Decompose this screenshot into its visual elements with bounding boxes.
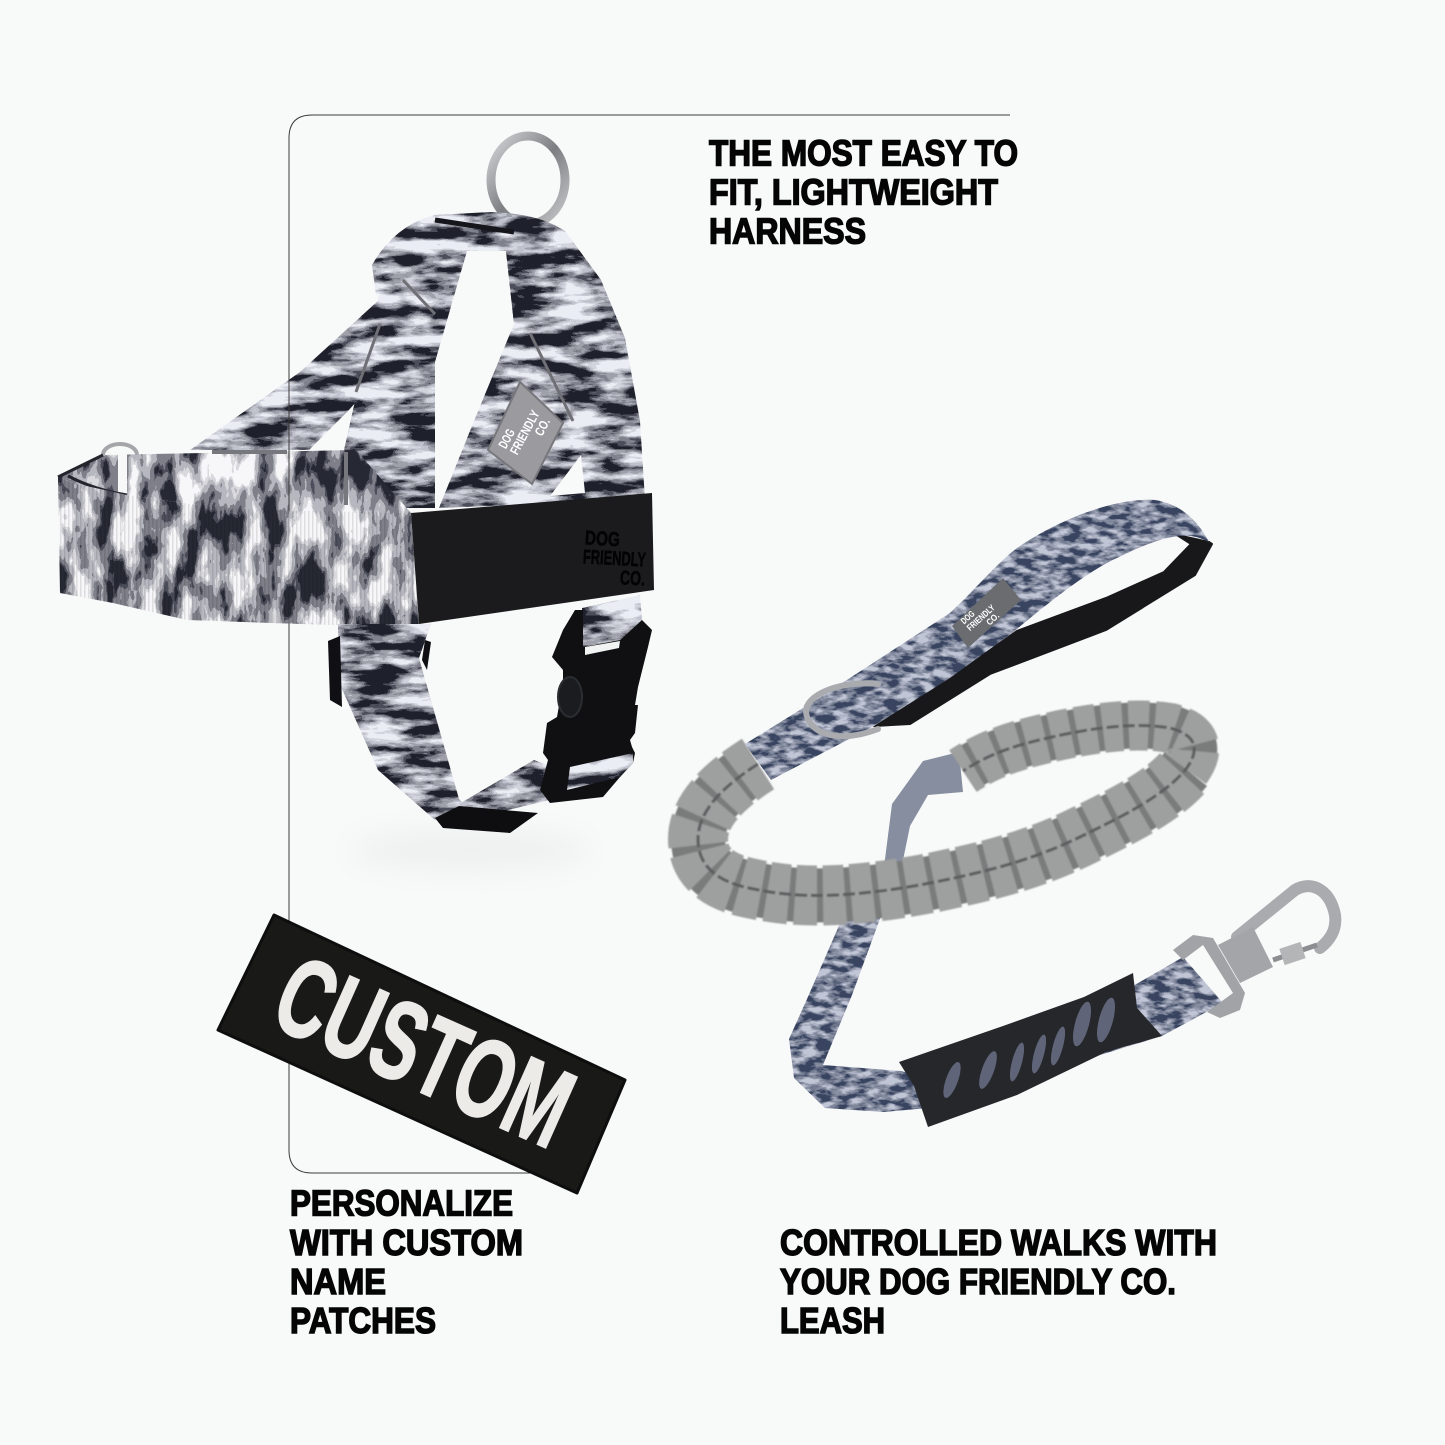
clasp body — [1218, 927, 1273, 983]
caption: patches — [290, 1182, 523, 1341]
rubber grip — [899, 973, 1162, 1127]
handle D ring — [806, 683, 878, 736]
pad brand text — [581, 527, 648, 591]
caption: patches: WITH CUSTOM — [290, 1222, 523, 1263]
harness front — [58, 382, 654, 833]
belt stitching — [212, 452, 346, 505]
caption: patches: NAME — [290, 1261, 386, 1302]
caption: leash: LEASH — [780, 1300, 885, 1341]
harness rear straps — [58, 136, 645, 513]
handle label text: FRIENDLY — [965, 603, 997, 633]
strap label — [488, 382, 563, 484]
camo straps — [190, 212, 645, 508]
slider — [328, 636, 431, 707]
caption: leash: YOUR DOG FRIENDLY CO. — [780, 1261, 1176, 1302]
custom name patch — [218, 915, 625, 1193]
strap label text — [495, 401, 554, 463]
strap gap — [550, 455, 585, 496]
strap label text: CO. — [531, 415, 553, 438]
caption: leash: CONTROLLED WALKS WITH — [780, 1222, 1217, 1263]
buckle strap — [582, 595, 642, 647]
pad brand text: FRIENDLY — [582, 546, 647, 572]
pad brand text: CO. — [619, 567, 645, 591]
top arch slit — [435, 220, 514, 232]
leash lower strap — [789, 905, 928, 1112]
clasp gate — [1273, 945, 1317, 960]
buckle — [540, 610, 652, 803]
small metal ring — [103, 444, 137, 466]
grip holes — [940, 996, 1119, 1100]
patch text: CUSTOM — [257, 931, 591, 1172]
black pad — [411, 493, 654, 624]
buckle hole — [558, 677, 582, 717]
caption: leash — [780, 1222, 1217, 1341]
strap label text: FRIENDLY — [507, 407, 543, 457]
hook — [1237, 886, 1335, 948]
bungee section — [698, 726, 1194, 895]
belt ribbing — [58, 477, 419, 626]
caption: harness — [709, 132, 1018, 252]
pad brand text: DOG — [584, 527, 621, 551]
front belt — [58, 477, 419, 626]
strap stitching — [356, 280, 573, 421]
caption: harness: FIT, LIGHTWEIGHT — [709, 172, 998, 212]
harness shadow — [350, 830, 590, 870]
handle label text: DOG — [959, 609, 977, 626]
leash rear strap — [883, 752, 963, 875]
leash — [698, 500, 1335, 1127]
handle lining — [874, 535, 1212, 726]
caption: patches: PATCHES — [290, 1300, 436, 1341]
inner belt edges — [58, 455, 127, 495]
strap label text: DOG — [495, 426, 518, 451]
handle label text: CO. — [984, 611, 1001, 627]
caption: patches: PERSONALIZE — [290, 1182, 513, 1224]
bottom strap end — [435, 806, 538, 833]
caption: harness: THE MOST EASY TO — [709, 132, 1018, 174]
swivel loop — [1173, 935, 1245, 1018]
handle strap — [745, 500, 1209, 780]
handle label — [952, 578, 1021, 648]
bottom strap — [459, 760, 560, 818]
metal clasp — [1173, 886, 1335, 1018]
connector line — [289, 115, 1010, 1173]
lower strap — [338, 624, 470, 820]
buckle slot — [585, 641, 620, 655]
inner belt white stripe — [118, 453, 127, 494]
clasp strap — [928, 957, 1223, 1108]
caption: harness: HARNESS — [709, 210, 866, 252]
buckle window strap — [567, 753, 633, 790]
metal top ring — [491, 136, 565, 224]
inner belt — [58, 450, 411, 513]
